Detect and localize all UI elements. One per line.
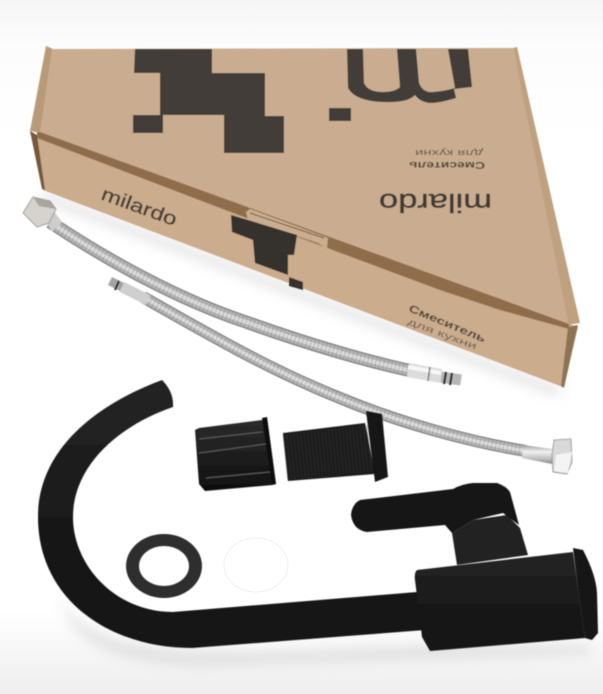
flap tab slot <box>250 213 324 238</box>
faucet body end cap <box>573 548 598 640</box>
faucet <box>38 380 598 651</box>
lid logo dot <box>329 108 351 121</box>
clear gasket ring <box>224 538 288 592</box>
cardboard box <box>30 46 580 388</box>
front logo square <box>289 277 303 290</box>
faucet handle lever <box>351 483 519 533</box>
sleeve flange <box>262 417 276 485</box>
black washer <box>126 534 202 598</box>
lid text: for kitchen: для кухни <box>415 147 483 158</box>
faucet body cylinder <box>415 552 585 651</box>
lid pixel logo <box>133 49 284 153</box>
flap tab <box>246 209 328 249</box>
short hose nut <box>552 439 572 474</box>
lid text: product name: Смеситель <box>409 159 485 170</box>
long hose tip <box>441 377 461 380</box>
long hose nut <box>23 197 56 227</box>
box right flap <box>513 47 580 325</box>
short hose braid <box>143 297 526 451</box>
front text: for kitchen: для кухни <box>406 317 478 352</box>
short flexible hose <box>110 281 572 474</box>
box right edge <box>561 325 578 388</box>
long hose o-rings <box>444 372 452 385</box>
front pixel logo <box>231 215 297 275</box>
sleeve body <box>195 417 276 491</box>
faucet spout <box>38 380 425 648</box>
short hose fitting <box>122 287 148 300</box>
short hose tip <box>110 281 122 287</box>
faucet neck <box>452 515 528 565</box>
long hose fitting highlight <box>408 367 441 373</box>
front brand name: milardo <box>98 184 180 231</box>
long hose nut facet <box>33 197 56 209</box>
short hose o-ring <box>115 281 119 290</box>
long hose braid <box>50 222 412 371</box>
faucet shadow <box>60 600 590 666</box>
long hose tube neck <box>42 206 62 232</box>
lid letter m mark <box>347 49 472 103</box>
shank flange <box>366 411 388 482</box>
box front side <box>33 136 578 387</box>
long flexible hose <box>23 197 461 385</box>
box lid <box>40 48 569 326</box>
threaded shank <box>283 411 388 482</box>
threaded sleeve nut <box>195 417 276 491</box>
lid edge shadow <box>37 132 569 329</box>
shank thread <box>283 423 375 481</box>
box left flap <box>30 46 53 133</box>
long hose fitting seam <box>428 367 430 381</box>
shank thread lines <box>285 448 371 457</box>
box shadow <box>40 192 563 396</box>
short hose end fitting <box>522 445 553 464</box>
long hose fitting <box>408 370 441 376</box>
lid brand name: milardo <box>379 188 492 218</box>
sleeve ridges <box>199 432 270 478</box>
box left edge <box>30 131 45 190</box>
front text: product name: Смеситель <box>407 303 488 345</box>
short hose nut shade <box>554 452 572 473</box>
